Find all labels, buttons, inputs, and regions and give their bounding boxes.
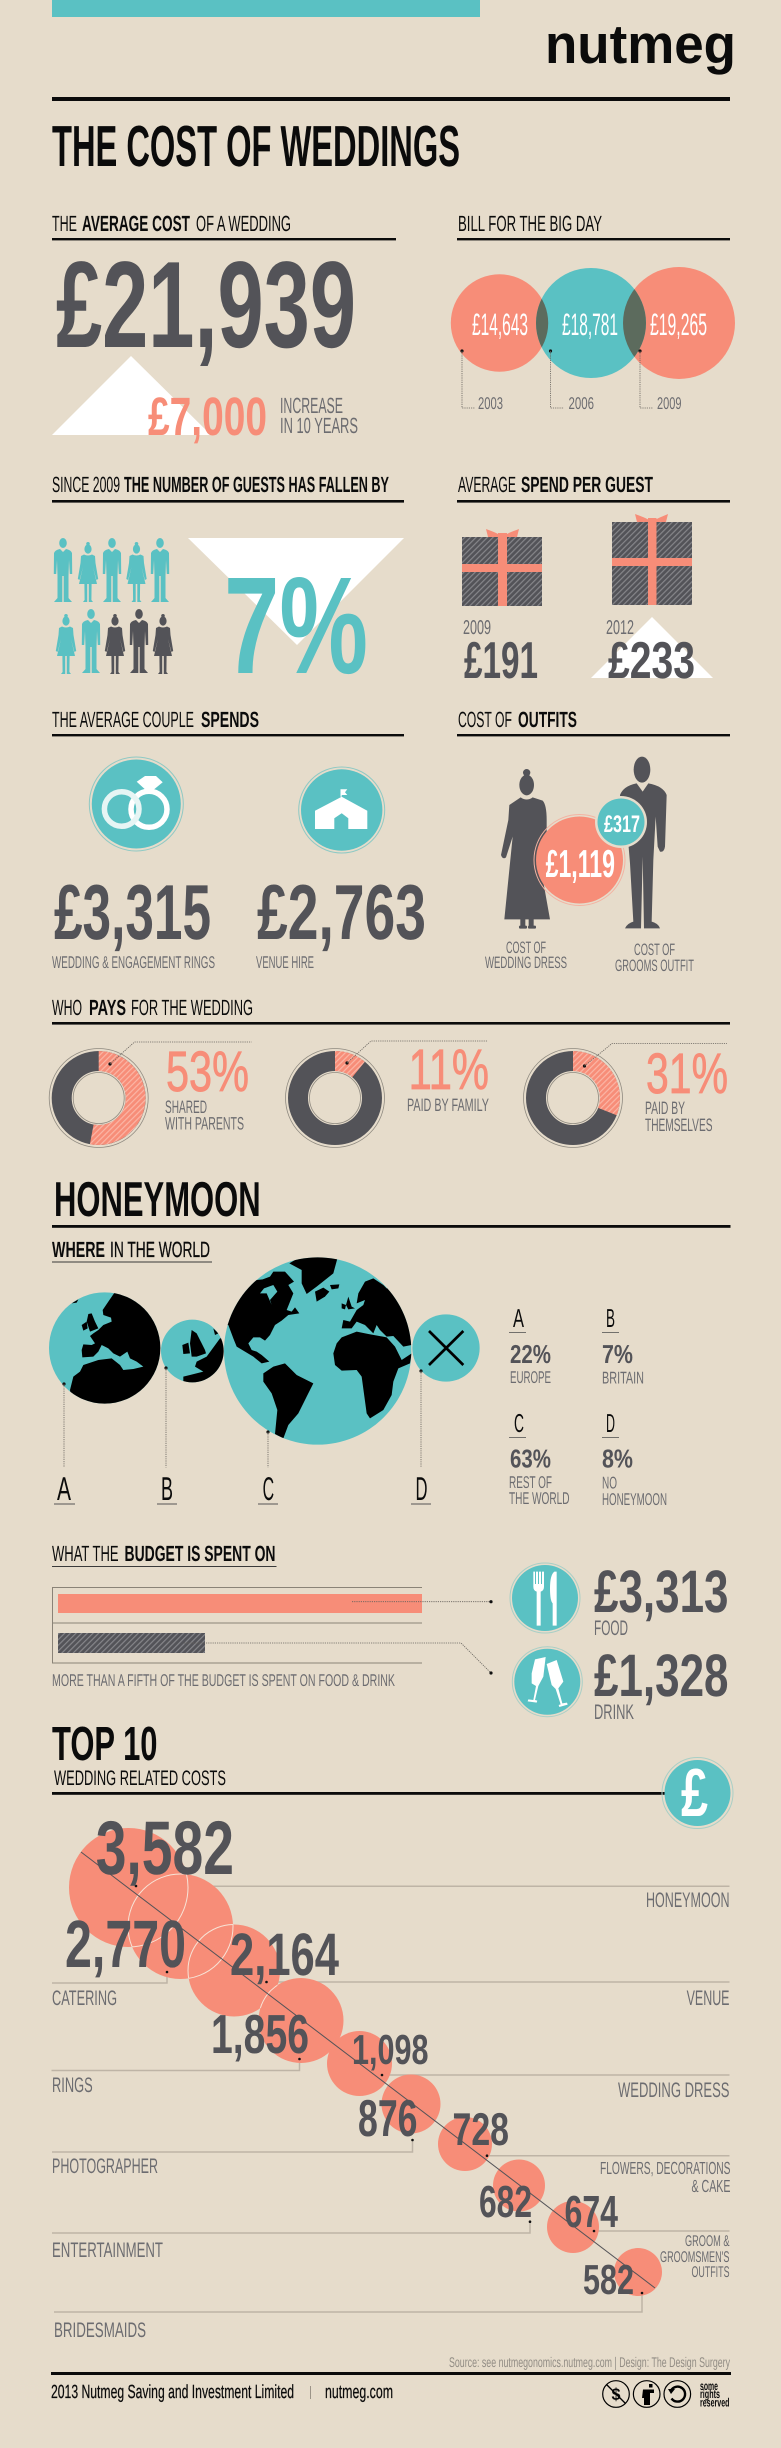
value venue: 2,164 [230,1921,339,1988]
donut: 53 percent: WITH PARENTS [165,1114,244,1134]
donut: 11 percent: PAID BY FAMILY [407,1095,489,1115]
logo: nutmeg: nutmeg [545,13,736,75]
some rights reserved: reserved [700,2396,730,2410]
label venue: VENUE HIRE [256,953,314,972]
bubble: groom outfit cost [595,796,647,848]
footer text: nutmeg.com [325,2382,393,2403]
globes [49,1255,480,1445]
venn chart: £18,781 [562,307,618,342]
bubble chart [69,1828,662,2296]
increase caption: IN 10 YEARS [280,413,358,438]
heading: OUTFITS [518,707,577,732]
legend A: EUROPE [510,1368,551,1387]
heading: SINCE 2009 [52,472,120,497]
label bridesmaids: BRIDESMAIDS [54,2319,146,2342]
label groom [615,941,694,975]
legend B: 7% [602,1339,633,1369]
letter labels: B [161,1470,173,1507]
heading: SPENDS [201,707,259,732]
value food: £3,313 [594,1558,728,1625]
panel: top 10 [52,1718,733,2342]
legend B: BRITAIN [602,1368,644,1388]
white triangle 2012 [591,617,713,678]
some rights reserved [700,2379,730,2410]
label rings: WEDDING & ENGAGEMENT RINGS [52,953,215,972]
increase amount: £7,000 [148,387,267,447]
legend D: 8% [602,1444,633,1474]
legend B [602,1303,644,1388]
value flowers: 728 [452,2103,509,2155]
bubble: wedding dress cost: £1,119 [546,843,615,886]
some rights reserved: rights [700,2387,720,2401]
value entertainment: 682 [479,2176,532,2227]
venn chart: 2003 [478,394,503,413]
value rings: 1,856 [211,2003,309,2065]
heading [52,211,396,240]
icon: pound: £ [681,1755,708,1831]
heading [52,995,730,1025]
heading: FOR THE WEDDING [131,995,253,1020]
venn chart: 2009 [657,394,682,413]
bubble: wedding dress cost [534,814,625,906]
heading: SPEND PER GUEST [521,472,653,497]
legend D [602,1408,667,1509]
heading: OF A WEDDING [196,211,291,236]
value 2012: £233 [608,632,695,690]
panel: where in the world [49,1237,667,1509]
dots [135,1885,643,2294]
panel: bill for the big day [451,211,735,413]
icon: attribution [633,2381,660,2407]
header rule [52,97,730,101]
donut: 11 percent: 11% [409,1038,489,1102]
legend D: D [606,1408,615,1438]
gift 2009 [462,529,542,606]
heading: TOP 10 [52,1718,158,1771]
donut: 53 percent: 53% [166,1040,249,1104]
footer text: 2013 Nutmeg Saving and Investment Limited [51,2382,294,2403]
big number: £21,939 [56,237,356,374]
increase caption: INCREASE [280,393,343,418]
legend C: REST OF [509,1473,552,1492]
label rings: RINGS [52,2074,93,2097]
heading [52,707,404,736]
icon: rings [89,757,183,851]
title: THE COST OF WEDDINGS [52,114,460,179]
panel: who pays [49,995,730,1148]
honeymoon rule [52,1225,730,1228]
label groom: GROOMS OUTFIT [615,957,694,975]
value catering: 2,770 [65,1907,186,1982]
legend A [509,1303,551,1387]
panel: what the budget is spent on [52,1541,728,1724]
legend C [509,1408,570,1508]
subheading: WEDDING RELATED COSTS [54,1767,226,1790]
label dress: COST OF [506,939,546,957]
heading: IN THE WORLD [110,1237,210,1262]
honeymoon section heading: HONEYMOON [54,1173,261,1227]
leader lines [52,1886,730,2312]
label groom: GROOMSMEN'S [660,2249,730,2266]
icon: tent [299,767,385,853]
globe C: rest of the world [224,1257,412,1445]
heading: PAYS [89,995,126,1020]
panel: average couple spends [52,707,426,972]
donut: 53 percent: SHARED [165,1097,207,1117]
white triangle [52,356,211,435]
legend C: C [514,1408,524,1438]
label groom [660,2233,730,2281]
heading [457,707,730,736]
label groom: GROOM & [685,2233,730,2250]
legend A: A [513,1303,524,1333]
value photographer: 876 [358,2090,418,2148]
heading: AVERAGE [458,472,516,497]
licence icons [603,2379,730,2410]
heading: THE NUMBER OF GUESTS HAS FALLEN BY [124,472,389,497]
icon: bride [501,769,550,929]
donut: 31 percent: THEMSELVES [645,1115,712,1135]
panel: average spend per guest [457,472,730,690]
heading [52,1541,276,1567]
donut: 53 percent [49,1040,252,1148]
label dress [485,939,567,972]
value groom: 674 [564,2186,618,2237]
globe A: Europe [49,1292,160,1404]
legend D: HONEYMOON [602,1490,667,1509]
donut: 31 percent: 31% [646,1042,728,1106]
icon: champagne glasses [512,1647,582,1717]
letter labels: C [263,1470,274,1507]
venn chart [451,267,735,413]
legend A: 22% [510,1339,551,1369]
header band [52,0,480,17]
letter labels: A [57,1470,71,1507]
icon: share alike [664,2381,691,2407]
legend C: THE WORLD [509,1489,570,1508]
heading [52,1237,212,1262]
donut: 31 percent [524,1042,728,1148]
value venue: £2,763 [257,868,426,956]
icon: fork and knife [510,1563,580,1633]
people icons [54,538,173,674]
panel: guests fallen [52,472,404,703]
year 2009: 2009 [463,617,491,639]
legend C: 63% [510,1444,551,1474]
value bridesmaids: 582 [583,2256,634,2303]
globe D: no honeymoon [412,1314,480,1382]
label venue: VENUE [687,1987,730,2010]
year 2012: 2012 [606,617,634,639]
label entertainment: ENTERTAINMENT [52,2239,163,2262]
label drink: DRINK [594,1701,634,1724]
value rings: £3,315 [54,868,211,956]
donut: 31 percent: PAID BY [645,1098,685,1118]
venn chart: 2006 [568,394,594,413]
heading: BILL FOR THE BIG DAY [458,211,602,236]
bubble: groom outfit cost: £317 [604,811,640,838]
letter labels: D [416,1470,428,1507]
letter labels [54,1470,431,1507]
footer rule [51,2372,731,2375]
heading [52,472,404,503]
heading: AVERAGE COST [82,211,190,236]
value wedding dress: 1,098 [352,2026,428,2073]
label flowers [600,2158,730,2196]
icon: no commercial: $ [612,2385,621,2404]
pointers [62,1366,423,1468]
heading: WHERE [52,1237,105,1262]
caption: MORE THAN A FIFTH OF THE BUDGET IS SPENT ON FOOD & DRINK [52,1671,395,1690]
panel: cost of outfits [457,707,730,975]
globe B: Britain [161,1320,224,1382]
venn chart: £14,643 [472,307,528,342]
icon: groom [620,757,667,928]
top 10 rule [52,1792,665,1795]
bar chart [52,1588,493,1675]
icon: pound [662,1755,733,1831]
7 percent: 7% [224,549,368,703]
heading [457,472,730,503]
heading: BUDGET IS SPENT ON [124,1541,276,1566]
value honeymoon: 3,582 [96,1806,234,1891]
heading: THE AVERAGE COUPLE [52,707,194,732]
label groom: COST OF [634,941,675,959]
gift 2012 [612,514,692,605]
legend D: NO [602,1474,617,1492]
heading: WHO [52,995,82,1020]
increase caption [280,393,358,438]
label photographer: PHOTOGRAPHER [52,2155,158,2178]
label food: FOOD [594,1617,628,1640]
legend B: B [606,1303,615,1333]
heading: THE [52,211,77,236]
value drink: £1,328 [594,1642,728,1709]
label groom: OUTFITS [692,2264,730,2281]
white inverted triangle [188,538,404,645]
venn chart: £19,265 [650,307,707,342]
heading: COST OF [458,707,512,732]
donut: 11 percent [286,1038,489,1148]
panel: average cost of a wedding [52,211,396,447]
heading: WHAT THE [52,1541,119,1566]
label flowers: & CAKE [692,2176,730,2196]
label dress: WEDDING DRESS [485,954,567,972]
value 2009: £191 [464,632,538,690]
some rights reserved: some [700,2379,718,2393]
label catering: CATERING [52,1987,117,2010]
